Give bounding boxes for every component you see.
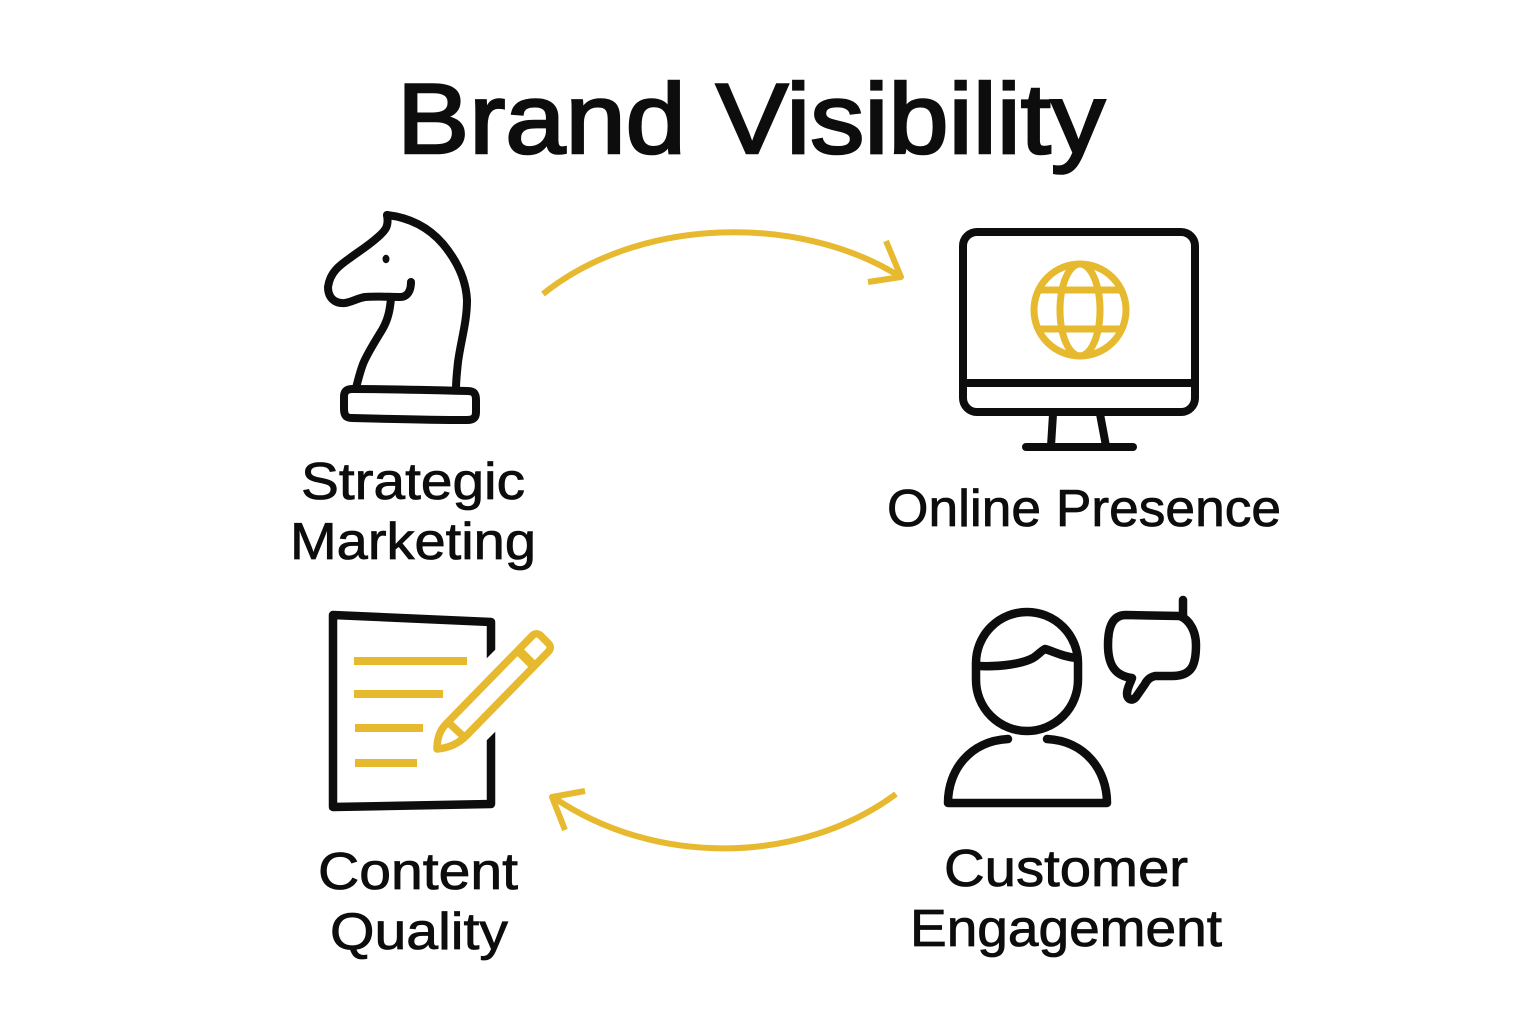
label: customer engagement: Customer	[944, 839, 1188, 897]
label: strategic marketing: Marketing	[290, 512, 536, 570]
icon: pencil	[437, 634, 550, 749]
label: customer engagement	[910, 839, 1222, 957]
icon: document with pencil	[333, 615, 550, 807]
icon: customer with speech bubble	[948, 600, 1196, 803]
icon: chess knight	[328, 215, 476, 420]
arrow: bottom	[552, 791, 896, 848]
arrow: top	[543, 232, 901, 294]
label: content quality: Content	[318, 842, 518, 900]
label: content quality: Quality	[330, 902, 508, 960]
label: strategic marketing: Strategic	[301, 452, 525, 510]
label: online presence: Online Presence	[887, 479, 1281, 537]
label: strategic marketing	[290, 452, 536, 570]
label: content quality	[318, 842, 518, 960]
icon: monitor with globe	[963, 232, 1195, 447]
label: customer engagement: Engagement	[910, 899, 1222, 957]
icon: globe	[1034, 264, 1126, 356]
title: Brand Visibility	[397, 63, 1106, 174]
icon: speech bubble	[1108, 600, 1196, 700]
